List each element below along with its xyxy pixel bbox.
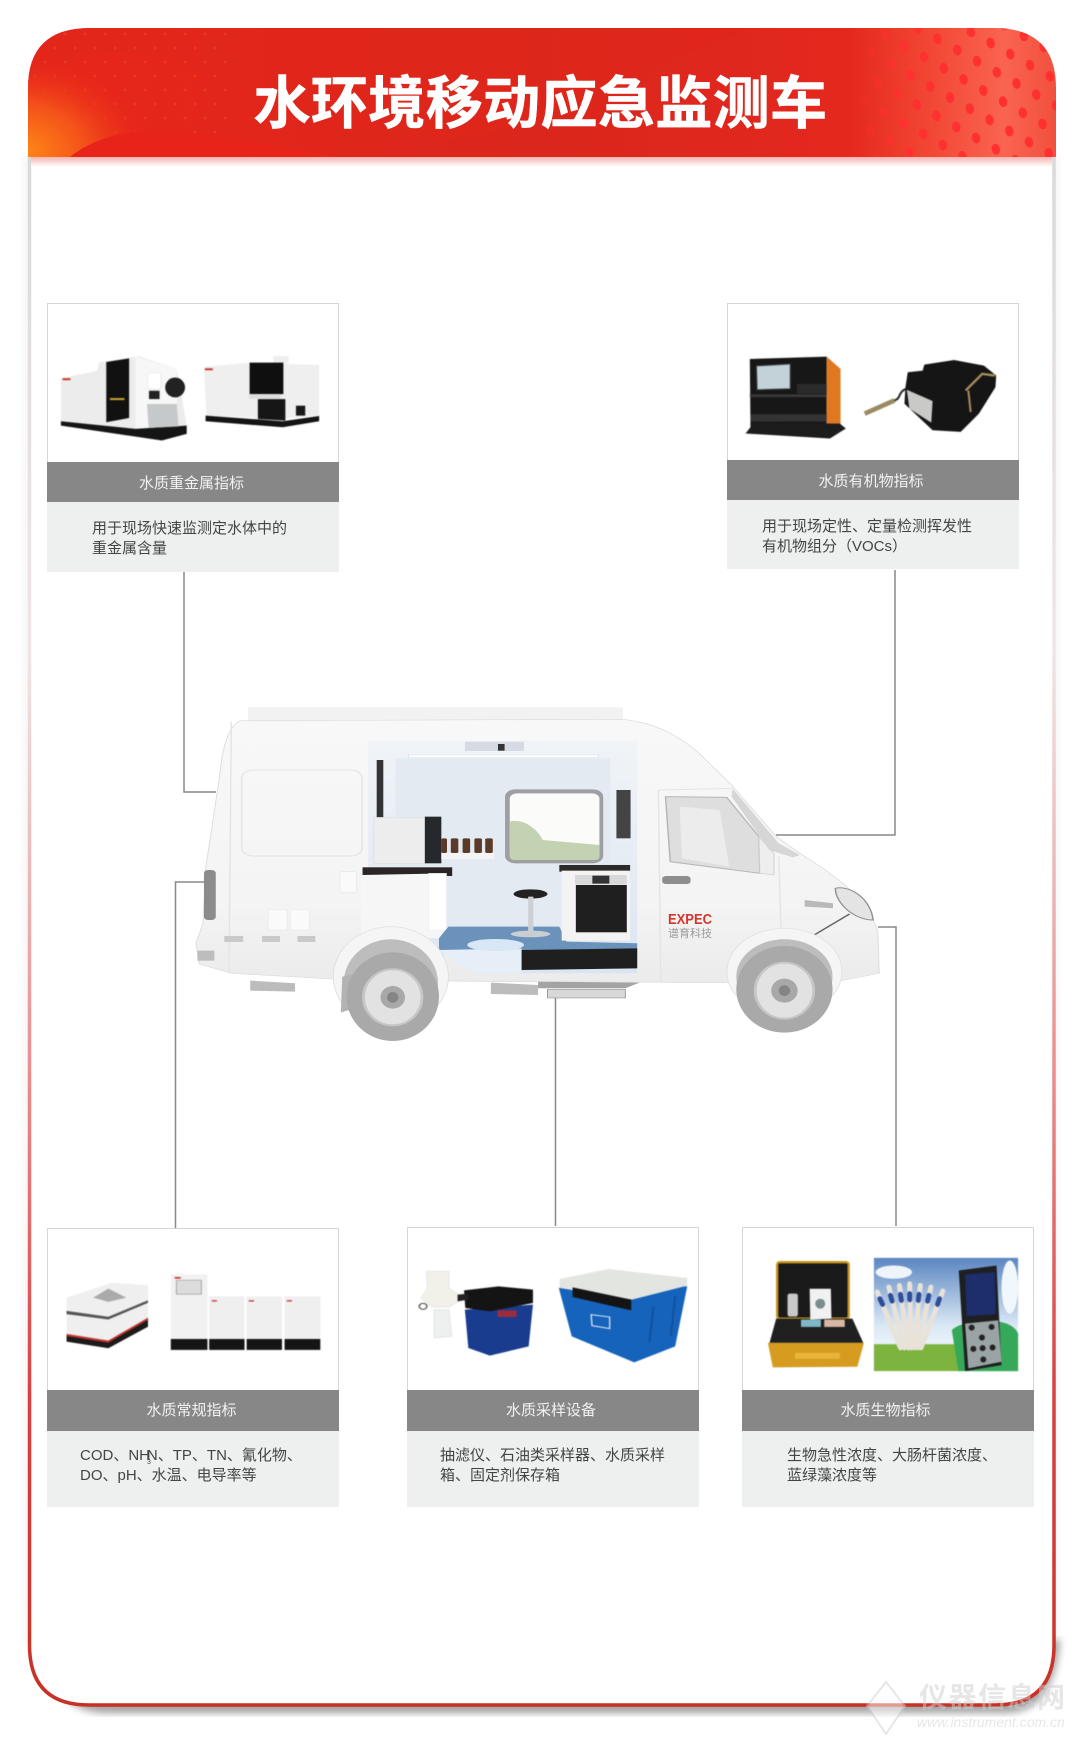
headlight	[805, 888, 873, 935]
card heading: 水质重金属指标	[139, 475, 244, 492]
card description: 蓝绿藻浓度等	[787, 1467, 877, 1484]
instrument images: GC-MS units	[727, 303, 1019, 460]
panel: sampling equipment	[407, 1227, 699, 1507]
panel: biological indicators	[742, 1227, 1034, 1507]
watermark	[866, 1680, 1067, 1736]
rear wheel	[333, 927, 448, 1041]
card description: 生物急性浓度、大肠杆菌浓度、	[787, 1447, 997, 1464]
equipment images: sampler and cooler box	[407, 1227, 699, 1390]
card heading	[742, 1390, 1034, 1431]
watermark logo	[866, 1680, 906, 1736]
card description	[47, 502, 339, 572]
cab door and window	[662, 788, 800, 884]
roof rail and awning	[248, 707, 623, 735]
front wheel	[727, 928, 842, 1033]
instrument images: atomic spectrometers	[47, 303, 339, 462]
interior of van	[361, 741, 637, 973]
card heading	[407, 1390, 699, 1431]
card description: DO、pH、水温、电导率等	[80, 1467, 257, 1484]
title: 水环境移动应急监测车	[254, 72, 828, 136]
under-body parts	[250, 981, 640, 998]
logo on van door	[668, 912, 712, 940]
instrument images: analyzers	[47, 1228, 339, 1390]
reagent bottles	[441, 838, 494, 859]
van body	[196, 719, 879, 983]
card heading: 水质生物指标	[840, 1402, 930, 1419]
left counter	[361, 817, 452, 938]
card heading: 水质有机物指标	[818, 473, 924, 490]
panel: heavy metal indicators	[47, 303, 339, 572]
card heading	[727, 460, 1019, 500]
card description	[742, 1431, 1034, 1507]
card description: 用于现场定性、定量检测挥发性	[762, 518, 972, 535]
watermark url: www.instrument.com.cn	[917, 1714, 1065, 1730]
card description: 用于现场快速监测定水体中的	[92, 520, 287, 537]
floor	[439, 927, 637, 968]
card description: 有机物组分（VOCs）	[762, 538, 907, 555]
logo on van door: EXPEC	[668, 912, 712, 928]
header banner	[28, 28, 1056, 157]
card description: 重金属含量	[92, 540, 167, 557]
card heading	[47, 462, 339, 502]
instrument cabinet	[559, 865, 630, 941]
card description	[727, 500, 1019, 569]
panel: organic compound indicators	[727, 303, 1019, 569]
rear light and details	[197, 870, 356, 961]
body panels	[229, 722, 781, 982]
equipment images: test kit and handheld probe	[742, 1227, 1034, 1390]
card description	[47, 1431, 339, 1507]
window	[505, 789, 603, 863]
card heading: 水质常规指标	[146, 1402, 236, 1419]
card description: 抽滤仪、石油类采样器、水质采样	[440, 1447, 665, 1464]
panel: conventional indicators	[47, 1228, 339, 1507]
logo on van door: 谱育科技	[668, 926, 712, 940]
lab stool	[511, 889, 550, 937]
card description: COD、NH3N、TP、TN、氰化物、	[80, 1447, 302, 1466]
card description	[407, 1431, 699, 1507]
card description: 箱、固定剂保存箱	[440, 1467, 560, 1484]
card heading	[47, 1390, 339, 1431]
card heading: 水质采样设备	[506, 1402, 596, 1419]
watermark name: 仪器信息网	[919, 1682, 1067, 1713]
